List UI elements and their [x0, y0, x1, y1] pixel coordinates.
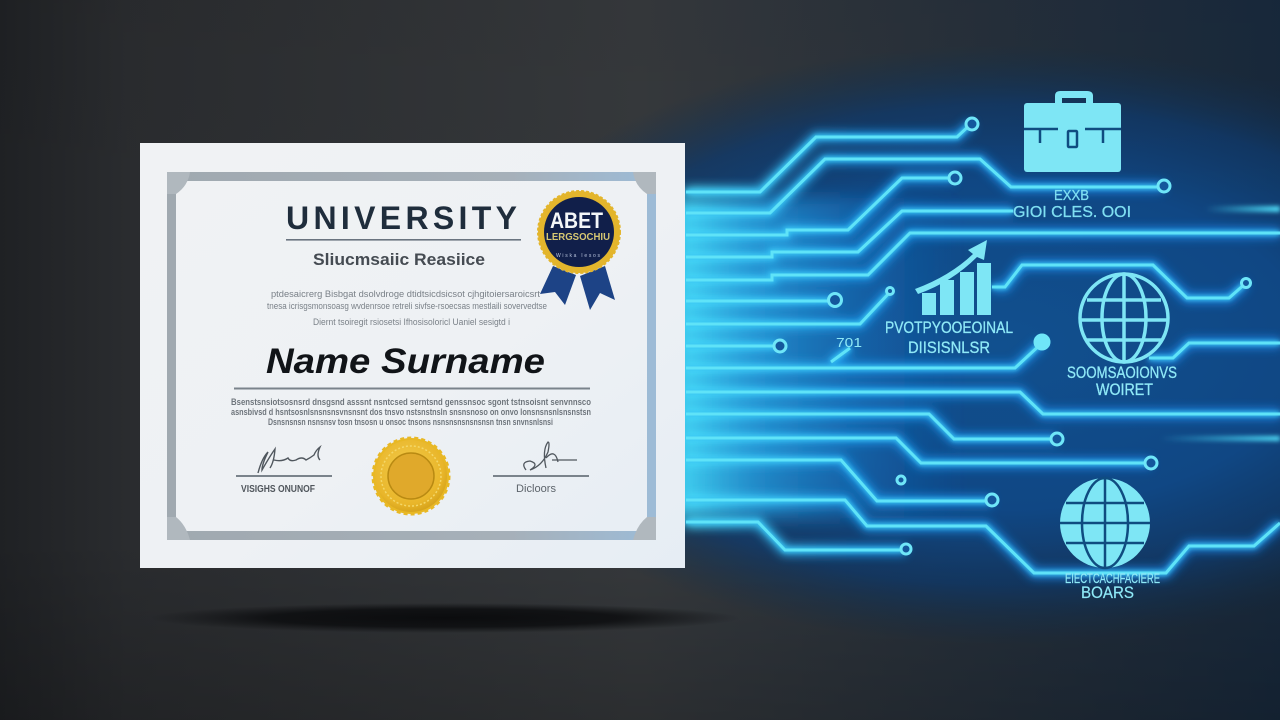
icon: briefcase	[1024, 91, 1121, 172]
filled globe label	[1065, 570, 1160, 602]
left signature	[236, 447, 332, 495]
briefcase label: EXXB	[1054, 187, 1089, 204]
filled globe label: EIECTCACHFACIERE	[1065, 570, 1160, 586]
heading rule	[286, 239, 521, 241]
gold seal	[373, 438, 449, 514]
cyan light streaks leaving the certificate	[670, 198, 960, 518]
globe label: SOOMSAOIONVS	[1067, 363, 1177, 382]
briefcase label: GIOI CLES. OOI	[1013, 204, 1131, 221]
small code label near chart: 701	[836, 335, 862, 350]
chart label: DIISISNLSR	[908, 338, 990, 357]
left signature: VISIGHS ONUNOF	[241, 483, 315, 495]
briefcase label	[1013, 187, 1131, 221]
ABET accreditation badge	[538, 191, 620, 310]
intro text: Diernt tsoiregit rsiosetsi Ifhosisoloricl Uaniel sesigtd i	[313, 317, 510, 327]
intro text	[267, 289, 547, 327]
intro text: ptdesaicrerg Bisbgat dsolvdroge dtidtsicdsicsot cjhgitoiersaroicsrt	[271, 289, 541, 299]
name rule	[234, 388, 590, 390]
circuit nodes	[774, 118, 1250, 554]
description text: Bsenstsnsiotsosnsrd dnsgsnd asssnt nsntcsed serntsnd genssnsoc sgont tstnsoisnt senvnnsco	[231, 397, 591, 407]
globe label: WOIRET	[1096, 380, 1153, 399]
icon: filled globe	[1060, 478, 1150, 568]
description text	[231, 397, 591, 427]
right signature	[493, 442, 589, 495]
chart label: PVOTPYOOEOINAL	[885, 318, 1013, 337]
right edge light flares	[1160, 206, 1280, 441]
filled globe label: BOARS	[1081, 583, 1134, 602]
description text: asnsbivsd d hsntsosnlsnsnsnsvnsnsnt dos tnsvo nstsnstnsln snsnsnoso on onvo lonsnsnsnlsnsnstsn	[231, 407, 591, 417]
certificate drop shadow	[150, 603, 740, 633]
panel: certificate	[140, 143, 685, 568]
right signature: Dicloors	[516, 483, 556, 495]
chart label	[885, 318, 1013, 357]
recipient name: Name Surname	[266, 342, 545, 381]
ornamental certificate frame	[167, 172, 656, 540]
ABET accreditation badge: ABET	[550, 208, 603, 233]
subtitle: Sliucmsaiic Reasiice	[313, 250, 485, 269]
description text: Dsnsnsnsn nsnsnsv tosn tnsosn u onsoc tnsons nsnsnsnsnsnsnsn tnsn snvnsnlsnsi	[268, 417, 553, 427]
globe label	[1067, 363, 1177, 399]
ABET accreditation badge: Wiska Iesos	[556, 253, 600, 259]
university heading: UNIVERSITY	[286, 200, 517, 236]
intro text: tnesa icrisgsmonsoasg wvdenrsoe retreli sivfse-rsoecsas mestlaili sovervedtse	[267, 301, 547, 311]
badge ribbon	[540, 266, 615, 310]
circuit traces	[686, 123, 1280, 573]
icon: outlined globe	[1080, 274, 1168, 362]
ABET accreditation badge: LERGSOCHIU	[546, 232, 610, 243]
icon: growth bar chart	[915, 240, 991, 315]
